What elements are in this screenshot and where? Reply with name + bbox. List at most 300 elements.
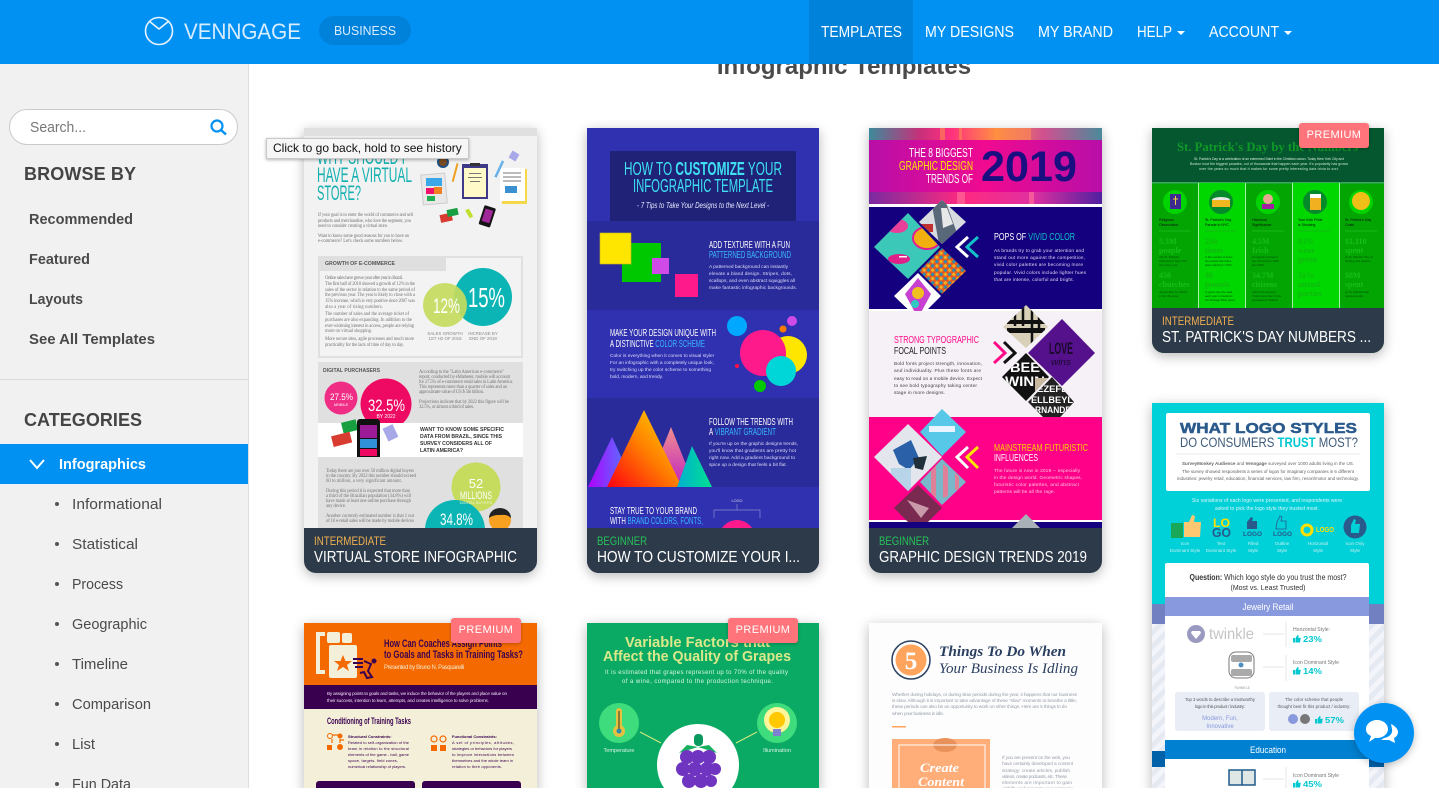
numbered circle [892,641,930,679]
background bands [1152,403,1384,788]
desk illustration [421,151,527,228]
panel: digital buyers: Today there are just over 50 million digital buyers [326,469,414,474]
logo: VENNGAGE [184,19,301,44]
connector lines [640,732,757,743]
panel: growth of e-commerce: INCREASE BY [468,331,498,336]
purple intro: their success, intention to learn, attempts, and creates intelligence to solve problems. [327,698,489,703]
card footer [587,528,819,573]
section: patterned background: A patterned background can instantly [709,264,789,270]
column: irish pride [1298,218,1330,298]
column: religious observation [1159,218,1191,298]
tooltip: back button: Click to go back, hold to see history [273,141,462,155]
icon: chat bubbles [1366,720,1398,743]
result: twinkle horizontal style: twinkle [1209,626,1254,643]
result: twinkle horizontal style: 23% [1303,635,1322,644]
column: parade in NYC: place starting in 1762. [1205,263,1233,267]
panel: digital purchasers: 32.5%, or almost a third of sales. [419,405,474,410]
icon labels: Dominant Style [1206,548,1237,553]
orange header: Presented by Bruno N. Pasquarelli [384,665,464,671]
column: st. patrick's day costs: on St. Patrick's Day [1345,290,1370,294]
column: historical significance: Significance [1252,223,1271,227]
column: parade in NYC: 250 [1205,237,1217,246]
grapes illustration [657,724,739,788]
poster title: Your Business Is Idling [939,661,1078,677]
column: irish pride: 83% [1298,237,1314,246]
panel: digital buyers: During this period it is expected that more than [326,489,411,494]
section: vibrant gradient: A VIBRANT GRADIENT [709,427,776,438]
structural constraints: elements of the game - ball, game [348,752,410,757]
template card: how can coaches assign points [304,623,537,788]
card footer: INTERMEDIATE [1162,314,1234,328]
panel: digital purchasers: BY 2022 [376,414,396,420]
section: strong typographic focal points: wins [1051,357,1072,367]
column: st. patrick's day costs: on St. Patrick's Day on [1345,255,1374,259]
column: parade in NYC: is the number of times [1205,255,1233,259]
category list: Statistical [72,536,138,553]
section: brand colors [610,499,760,556]
search box [10,110,238,144]
section: vibrant gradient: you'll know that gradients are pretty hot [709,448,797,454]
poster title: Affect the Quality of Grapes [603,648,791,665]
column: religious observation: visit St. Patrick's [1159,255,1180,259]
section: color scheme: A DISTINCTIVE COLOR SCHEME [610,339,705,350]
category list: Timeline [72,656,128,673]
template card: variable factors grapes [587,623,819,788]
column: irish pride: wear [1298,246,1315,255]
icon: thermometer [599,703,639,754]
body text: videos, create podcasts, etc. These [1002,774,1067,780]
panel: growth of e-commerce: GROWTH OF E-COMMERCE [325,261,396,267]
section: color scheme: try switching up the color scheme to something [610,367,711,373]
section: patterned background: elevate a bland design. Stripes, dots, [709,271,792,277]
nav links: MY DESIGNS [925,24,1014,41]
column: st. patrick's day costs: $8M [1345,271,1361,280]
section: brand colors: STAY TRUE TO YOUR BRAND [610,506,697,517]
section: strong typographic focal points: to see bold typography taking center [894,383,977,389]
intro paragraph [892,692,1078,717]
callout band: data from Brazil: DATA FROM BRAZIL, SINCE THIS [420,434,503,440]
column: parade in NYC: each year to transform [1205,294,1234,298]
panel: growth of e-commerce: The first half of 2018 showed a growth of 12% in the [325,282,415,287]
infographic title: HAVE A VIRTUAL [317,164,412,187]
section: strong typographic focal points: BEE [1010,359,1040,375]
question panel: (Most vs. Least Trusted) [1230,583,1306,592]
section: mainstream futuristic influences: The future is now in 2019 -- especially [994,468,1081,474]
column: irish pride: attend [1298,280,1320,289]
browse by heading: BROWSE BY [24,164,136,184]
structural constraints [327,734,410,769]
column: historical significance: claim Irish ancestry. [1252,290,1277,294]
poster header [1152,128,1384,184]
panel: growth of e-commerce: 12% [433,295,460,318]
column: religious observation: in the US alone. [1159,294,1179,298]
section: strong typographic focal points [869,305,1102,426]
section: patterned background: make fantastic infographic backgrounds. [709,285,797,291]
section: strong typographic focal points: LOVE [1049,339,1073,358]
structural constraints: Structural Constraints: [348,734,392,739]
column: st. patrick's day costs: spent [1345,280,1364,289]
panel: digital purchasers: This represents more than a quarter of sales and an [419,385,508,390]
active nav tab [809,0,913,64]
column: irish pride: green [1298,255,1318,264]
section: strong typographic focal points: stage in more designs. [894,390,945,396]
logo style icons: LOGO [1273,532,1292,538]
header banner [869,128,1102,204]
logo style icons: LO [1213,516,1230,530]
column: religious observation: 5.5M [1159,237,1177,246]
column: historical significance: Historical [1252,218,1267,222]
column: historical significance: 34.7M [1252,271,1274,280]
panel: growth of e-commerce [318,256,522,357]
heading: infographic templates: Infographic Templates [717,53,971,80]
panel: digital purchasers: According to the "Latin American e-commerce" [419,370,504,375]
body text [1002,755,1074,788]
card footer [1152,308,1384,353]
column: parade in NYC: the parade has taken [1205,259,1232,263]
section: pops of vivid color: stand out more against the competition, [994,255,1085,261]
structural constraints: Related to self-organization of the [348,740,410,745]
photo tile: create content: Create [920,760,959,775]
title panel: SurveyMonkey Audience and Venngage surveyed over 1000 adults living in the US. [1182,461,1354,466]
question panel [1165,563,1369,788]
icon labels: Style [1313,548,1323,553]
title panel: DO CONSUMERS TRUST MOST? [1180,434,1358,450]
callout band: data from Brazil: WANT TO KNOW SOME SPECIFIC [420,427,504,433]
header banner: TRENDS OF [926,171,973,186]
premium badge: coaches card: PREMIUM [459,624,513,636]
section: mainstream futuristic influences: INFLUENCES [994,453,1038,464]
section: pops of vivid color: POPS OF VIVID COLOR [994,232,1075,243]
poster header: St. Patrick's Day is a celebration of an esteemed Saint in the Christian canon. Today New York City and [1194,157,1344,161]
column: religious observation: Cathedral in New York [1159,259,1187,263]
browse links [29,211,155,348]
poster header: over the years so much that it makes for some pretty interesting data trivia to sort. [1199,167,1339,171]
template card: virtual store infographic [304,128,537,573]
category list: Comparison [72,696,151,713]
purple intro: By assigning points to goals and tasks, we induce the behavior of the players and place value on [327,691,507,696]
panel: growth of e-commerce: sales of the sector in relation to the same period of [325,288,415,293]
icon labels: Outline [1275,541,1290,546]
section: strong typographic focal points: FOCAL POINTS [894,346,946,357]
search box: Search... [30,119,86,136]
icon labels: Filled [1248,541,1259,546]
numbered circle: 5 [905,648,917,675]
section: pops of vivid color: vivid color palettes are becoming more [994,262,1083,268]
column: religious observation: people [1159,246,1182,255]
poster title [603,634,791,685]
column: parade in NYC: 40 [1205,271,1213,280]
icon labels: Style [1277,548,1287,553]
section: pops of vivid color [869,200,1102,319]
section: color scheme: bold, modern, and trendy. [610,374,663,380]
section: vibrant gradient [587,398,819,487]
panel: digital buyers: have made at least one online purchase through [326,499,412,504]
section: color scheme: For an infographic with a completely unique look, [610,360,714,366]
intro text: asked to pick the logo style they trusted most. [1215,506,1319,512]
card footer [304,528,537,573]
section: mainstream futuristic influences: patterns will be all the rage. [994,489,1055,495]
intro paragraph: need to consider creating a virtual store. [318,224,388,229]
column: religious observation: City every year. [1159,263,1178,267]
icon: thermometer: Temperature [604,748,634,754]
infographic title: STORE? [317,182,361,205]
icon labels [1170,541,1365,553]
section: strong typographic focal points: EZEFL [1037,384,1068,394]
column: religious observation: named after St. Patrick [1159,290,1188,294]
column: st. patrick's day costs: $1,110 [1345,237,1367,246]
intro paragraph [318,213,414,244]
column: st. patrick's day costs [1345,218,1377,298]
infographic title: WHY SHOULD I [317,146,405,169]
title block [610,151,796,221]
question panel: Question: Which logo style do you trust the most? [1190,573,1347,582]
icon labels: Icon Only [1345,541,1365,546]
functional constraints: Functional Constraints: [452,734,497,739]
section: pops of vivid color: that are intense, colorful and bright. [994,277,1074,283]
nav links: HELP [1137,24,1172,41]
panel: growth of e-commerce: END OF 2018 [469,336,497,341]
education band [1165,740,1369,759]
infographic title [317,146,412,205]
section: strong typographic focal points: Bold fonts project strength, innovation, [894,361,982,367]
title panel [1166,413,1370,491]
words box: Top 3 words to describe a trustworthy [1185,697,1256,702]
panel: growth of e-commerce: ever-widening interest in access, people are relying [325,324,415,329]
icon: light bulb [757,703,797,754]
column: religious observation: churches [1159,280,1190,289]
section: color scheme [610,316,807,392]
intro paragraph: these periods can also be an opportunity to work on other things. Here are 5 things to do [892,704,1067,710]
section: strong typographic focal points: RNANDE [1035,405,1071,415]
panel: growth of e-commerce: 15% increase, which is very positive since 2007 was [325,299,415,304]
poster title: of a wine, compared to the production technique. [622,679,773,685]
section: pops of vivid color: popular. Vivid colors include lighter hues [994,270,1087,276]
result: twinkle icon dominant style: TWINKLE [1234,686,1251,690]
title panel: industries: jewelry retail, education, financial services, law firm, resort/motor and technology. [1177,476,1359,481]
category list: List [72,736,96,753]
categories heading: CATEGORIES [24,410,142,430]
column: religious observation: 450 [1159,271,1171,280]
intro paragraph: Want to know some good reasons for you to have an [318,234,410,239]
panel: growth of e-commerce: purchases are also expanding. In addition to the [325,318,412,323]
category list: Geographic [72,616,147,633]
section: brand colors: WITH BRAND COLORS, FONTS, [610,516,703,527]
intro paragraph: Whether during holidays, or during slow periods during the year, it happens that our business [892,692,1078,698]
result: twinkle icon dominant style: 14% [1303,667,1322,676]
chat button [1354,703,1414,763]
section: patterned background: scallops, and even abstract squiggles all [709,278,795,284]
callout band: data from Brazil: LATIN AMERICA? [420,448,463,454]
template card: st. patrick's day numbers [1152,128,1384,353]
premium badge: st. patrick's card: PREMIUM [1307,129,1361,141]
panel: digital buyers: DIGITAL BUYERS [460,500,493,505]
column: st. patrick's day costs: cards annually. [1345,294,1364,298]
panel: digital buyers: a third of the Brazilian population (34.8%) will [326,494,412,499]
column icons [1163,190,1373,214]
section heading: Conditioning of Training Tasks [327,716,411,726]
result: twinkle horizontal style: Horizontal Style: [1293,627,1330,633]
panel: digital buyers: in the country. By 2022 this number should exceed [326,474,417,479]
column: historical significance: immigrants arrived in [1252,255,1278,259]
color scheme box: thought best fit this product / industry: [1278,704,1350,709]
panel: digital buyers [318,457,523,560]
panel: digital purchasers [318,362,523,430]
logo style icons [1171,515,1366,540]
result: twinkle icon dominant style: Icon Dominant Style [1293,660,1339,666]
body text: If you are present on the web, you [1002,755,1070,761]
section: brand colors: LOGO [732,499,743,503]
orange header [304,623,537,685]
structural constraints: team in relation to the structural [348,746,409,751]
card footer: INTERMEDIATE [314,534,386,548]
top navigation bar [0,0,1439,64]
column: historical significance: Irish [1252,246,1269,255]
panel: growth of e-commerce: also a year of rising numbers. [325,305,383,310]
category list: Informational [72,496,162,513]
result: twinkle icon dominant style [1229,652,1339,690]
poster header: St. Patrick's Day by the Numbers [1177,139,1358,154]
icon labels: Icon [1181,541,1190,546]
panel: digital buyers: of 10 e-retail sales will be made by mobile devices [326,519,414,524]
premium badge: grapes card: PREMIUM [736,624,790,636]
active category: infographics [0,444,248,484]
section: vibrant gradient: spice up a design that feels a bit flat. [709,462,787,468]
header banner: 2019 [981,143,1077,191]
tooltip: back button [266,138,469,159]
purple boxes [316,781,521,788]
column: historical significance: That's more than 7x the [1252,294,1282,298]
column: st. patrick's day costs: spent [1345,246,1364,255]
title panel: The survey showed respondents a series of logos for imaginary companies in 6 different [1182,469,1355,474]
column: irish pride: is Showing [1298,223,1315,227]
words box [1175,692,1265,731]
business badge: BUSINESS [334,23,396,38]
words box: logo in this product / industry: [1195,704,1245,709]
color scheme box: 57% [1325,716,1344,725]
icon labels: Style [1350,548,1360,553]
column: parade in NYC: St. Patrick's Day [1205,218,1231,222]
panel: digital purchasers: 27.5% [330,392,353,403]
card footer [869,528,1102,573]
functional constraints: A set of principles, attitudes, [452,740,514,745]
panel: growth of e-commerce: 1ST H2 OF 2018 [428,336,462,341]
column: st. patrick's day costs: St. Patrick's Day [1345,218,1371,222]
education band: Education [1250,745,1286,755]
logo style icons: GO [1212,525,1231,540]
section: strong typographic focal points: easy to read on a mobile device. Expect [894,376,983,382]
column: historical significance: the US between 1820 [1252,259,1279,263]
column: historical significance: population of Ireland. [1252,298,1278,302]
intro text: Six variations of each logo were presented, and respondents were [1192,498,1342,504]
premium badge: coaches card [451,618,521,643]
logo style icons: LOGO [1316,527,1334,534]
template card: graphic design trends 2019 [869,128,1102,573]
section: strong typographic focal points: STRONG TYPOGRAPHIC [894,335,979,346]
panel: digital buyers: any device. [326,504,346,509]
panel: growth of e-commerce: More secure sites, agile processes and much more [325,337,414,342]
question panel: Jewelry Retail [1242,602,1294,612]
column: parade in NYC [1205,218,1237,302]
column: parade in NYC: of green dye are used [1205,290,1233,294]
icon labels: Horizontal [1308,541,1328,546]
panel: digital buyers: 34.8% [440,510,473,529]
header banner: THE 8 BIGGEST [909,145,973,160]
intro paragraph: If your goal is to enter the world of commerce and sell [318,213,414,218]
template card: things to do when idling [869,623,1102,788]
card footer: BEGINNER [597,534,647,548]
business badge [319,16,411,45]
column: st. patrick's day costs: drinking and apparel. [1345,259,1371,263]
category list [55,496,162,788]
panel: digital purchasers: 32.5% [368,396,405,415]
nav links: TEMPLATES [821,24,902,41]
result: education icon dominant style: Icon Dominant Style [1293,773,1339,779]
column: religious observation: Observation [1159,223,1178,227]
panel: growth of e-commerce: The number of sales and the average ticket of [325,312,409,317]
column: parade in NYC: times [1205,246,1223,255]
template card: how to customize your infographic [587,128,819,573]
column: st. patrick's day costs: Costs [1345,223,1354,227]
section: patterned background [587,221,819,310]
photo tile: create content [892,738,990,788]
column: parade in NYC: Parade in NYC [1205,223,1229,227]
body text: have certainly developed a content [1002,761,1074,767]
logo [146,18,301,44]
panel: digital purchasers: Projections indicate that by 2022 this figure will be [419,400,509,405]
result: education icon dominant style [1229,767,1339,788]
panel: digital purchasers: DIGITAL PURCHASERS [323,368,381,374]
card footer: BEGINNER [879,534,929,548]
icon labels: Style [1248,548,1258,553]
section: vibrant gradient: If you're up on the graphic designs trends, [709,441,798,447]
section: mainstream futuristic influences: futuristic color palettes, and abstract [994,482,1080,488]
panel: digital buyers: Another currently estimated number is that 1 out [326,514,415,519]
poster title [939,644,1078,677]
column: irish pride: parties [1298,289,1322,298]
panel: growth of e-commerce: Online sales have grown year after year in Brazil. [325,276,403,281]
result: twinkle horizontal style [1187,622,1330,647]
panel: digital buyers: MILLIONS [460,490,492,502]
title block: - 7 Tips to Take Your Designs to the Next Level - [637,201,769,210]
poster header: Boston host the biggest parades, out of thousands that happen each year. It's popularity has grown [1190,162,1348,166]
section: color scheme: Color is everything when it comes to visual style! [610,353,714,359]
panel: growth of e-commerce: SALES GROWTH [427,331,463,336]
nav links: MY BRAND [1038,24,1113,41]
header banner: GRAPHIC DESIGN [899,158,973,173]
poster title: Things To Do When [939,644,1066,660]
panel: growth of e-commerce: 15% [468,282,505,313]
section: color scheme: MAKE YOUR DESIGN UNIQUE WITH [610,328,716,339]
functional constraints: relation to their opponents. [452,764,502,769]
body text: strategy: create articles, publish [1002,768,1070,774]
browse links: See All Templates [29,331,155,348]
intro paragraph: is slow. Although it is important to take advantage of these "slow" moments to breathe a little, [892,698,1077,704]
functional constraints: themselves and the whole team in [452,758,513,763]
panel: digital purchasers: approximate value of US $ 5bi billion. [419,390,484,395]
panel: growth of e-commerce: the previous year. The year is likely to close with a [325,293,416,298]
purple intro [304,685,537,709]
panel: digital buyers: 60 to million, a very significant amount. [326,479,402,484]
column: parade in NYC: pounds [1205,280,1230,289]
section: mainstream futuristic influences [869,409,1102,532]
functional constraints [431,734,514,769]
column: irish pride: 31% [1298,271,1314,280]
template card: what logo styles [1152,403,1384,788]
icon labels: Text [1217,541,1226,546]
intro paragraph: products and merchandise, who love the segment, you [318,219,412,224]
words box: Modern, Fun, [1202,716,1238,722]
active category: infographics: Infographics [59,456,146,473]
